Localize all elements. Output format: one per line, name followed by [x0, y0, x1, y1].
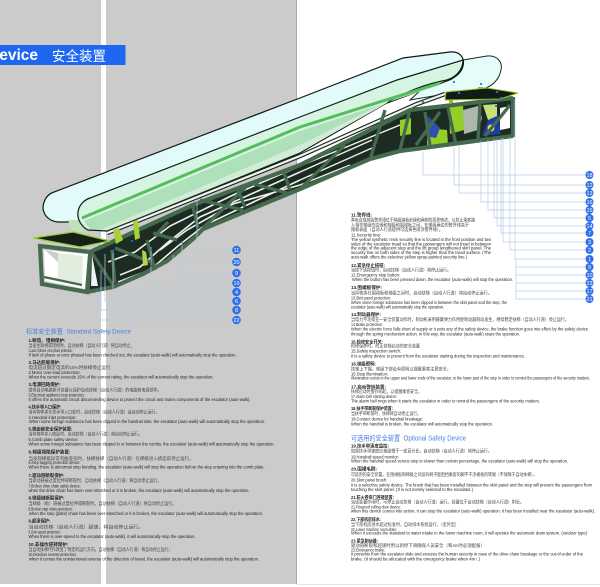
item 12: [351, 262, 513, 282]
item 6: 6.Step sagging protection device:: [28, 460, 80, 465]
item 20: [351, 466, 592, 492]
item 23: It prevents from the escalator slide and ensures the human security in case of the drive chain breakage or the out-of-order of the: [351, 552, 584, 556]
leader lines and number markers: right side: 13: [586, 191, 593, 197]
item 13: escalator (auto-walk) will automatically stop the operation.: [351, 304, 444, 310]
item 15: [351, 338, 525, 358]
item 6: 6.梯级塌陷保护装置:: [28, 448, 71, 456]
item 22: [351, 516, 587, 536]
item 11: security line on both sides of the step is higher than the tread surface. (The: [351, 250, 492, 255]
item 5: 5.梳齿板安全保护装置:: [28, 426, 73, 432]
item 23: [351, 538, 584, 562]
support under far balustrade: [68, 220, 84, 232]
item 19: 19.扶手带速度监控:: [351, 442, 390, 450]
item 3: 提供自动电路断开装置以保护自动扶梯（自动人行道）的电路和电源部件。: [28, 386, 162, 394]
leader lines and number markers: left side: 19: [233, 281, 240, 287]
leader lines and number markers: left side: 20: [233, 260, 240, 266]
item 13: 13.围裙板保护:: [351, 284, 383, 291]
item 8: [28, 494, 263, 516]
item 10: [28, 541, 259, 562]
item 20: touching the skirt panel. (It is not merely selected to the escalator.): [351, 487, 474, 492]
item 21: 当该装置作用时，可停止自动扶梯（自动人行道）运行。装置位于自动扶梯（自动人行道）附近。: [351, 498, 524, 506]
item 20: 20.围裙毛刷:: [351, 466, 378, 472]
item 7: [28, 472, 250, 493]
item 15: It is a safety device to prevent from the escalator starting during the inspection and maintenance.: [351, 354, 525, 358]
item 11: 入相邻梯级的边缘和梯级和围裙板之间。在梯级两边的警界线高于: [351, 222, 470, 228]
leader lines and number markers: right side: 18: [586, 173, 593, 179]
leader lines and number markers: right side: 2: [588, 248, 591, 254]
item 18: 当扶手带断裂时，扶梯将自动停止运行。: [351, 410, 421, 417]
item 13: [351, 284, 507, 310]
item 8: 当梯级（板）链被过度拉伸或断裂时，自动扶梯（自动人行道）将自动停止运行。: [28, 500, 176, 507]
item 11: 11.警界线:: [351, 212, 373, 218]
item 1: 1.Lack of phase, error phase protection:: [28, 348, 72, 353]
item 12: 12.Emergency stop button:: [351, 272, 400, 278]
item 11: 黄色合成树脂警界线位于梯级踏板前缘和两侧的周界转述，以防止乘客踏: [351, 216, 476, 224]
item 1: 当发生缺相或错相时，自动扶梯（自动人行道）将自动停止。: [28, 342, 134, 349]
item 21: 21.Fireproof rolling door device:: [351, 504, 401, 510]
item 9: 当自动扶梯（自动人行道）超速，将自动停止运行。: [28, 524, 144, 530]
title banner: 安全装置: [52, 48, 106, 64]
item 19: 19.Handrail speed monitor:: [351, 454, 399, 460]
heading: standard safety device: 标准安全装置 Standard Safety Device: [26, 326, 131, 336]
item 4: When some foreign substance has been clipped in the handrail inlet, the escalator (auto-walk) will automatically stop the operation.: [29, 419, 265, 424]
item 17: The alarm bell rings when it starts the escalator in order to remind the passengers of the security matters.: [351, 398, 540, 404]
item 6: When there is abnormal step bending, the escalator (auto-walk) will stop the operation before the step entering into the comb plate.: [28, 464, 264, 470]
item 17: 17.启动警铃装置:: [351, 384, 387, 390]
item 11: the edge of the adjacent step and the lift group lengthened skirt panel. The: [351, 246, 492, 250]
leader lines and number markers: left side: 4: [235, 290, 238, 296]
item 22: When it exceeds the standard to water intake in the lower machine room, it will operate the automatic drain system. (outdoor type): [351, 530, 587, 536]
item 11: sides of the escalator tread so that the passengers will not tread in between: [351, 242, 492, 246]
leader lines and number markers: right side: 10: [586, 273, 593, 279]
item 3: 3.电源回路保护:: [28, 381, 61, 388]
yellow posts: [113, 220, 140, 244]
item 12: 当按下该按钮时，自动扶梯（自动人行道）将停止运行。: [351, 266, 451, 274]
item 5: 当有物体夹入梳齿时，自动扶梯（自动人行道）将自动停止运行。: [28, 430, 142, 438]
item 16: 扶梯上下端。梯级下部设有照明以提醒乘客注意安全。: [351, 366, 451, 372]
item 4: 4.Handrail inlet protection:: [28, 415, 76, 420]
leader lines and number markers: right side: 1: [588, 257, 591, 263]
item 15: 15.检修安全开关:: [351, 338, 383, 346]
right deck: [445, 88, 518, 100]
item 20: 20.Skirt panel brush:: [351, 478, 387, 482]
item 4: 4.扶手带入口保护:: [28, 404, 62, 410]
left end box: [40, 246, 90, 292]
leader lines and number markers: right side: 5: [588, 216, 591, 222]
leader lines and number markers: right side: 9: [588, 265, 591, 271]
item 13: 当异物夹在围裙板和梯级之间时，自动扶梯（自动人行道）将自动停止运行。: [351, 290, 492, 296]
item 19: When the handrail speed versus step is slower than certain percentage, the escalator (auto-walk) will stop the operation.: [351, 458, 568, 464]
text block: standard devices 11-18: [351, 212, 590, 426]
item 13: 13.Skirt panel protection:: [351, 296, 391, 300]
item 23: 23.Emergency brake:: [351, 548, 385, 552]
far balustrade upper end: [410, 56, 501, 100]
item 17: 17.Alarm bell starting device:: [351, 394, 397, 399]
item 2: 2.Motor over-load protection:: [28, 370, 80, 375]
item 7: when the drive chain has been over-stretched or it is broken, the escalator (auto-walk) will automatically stop the operation.: [28, 488, 250, 493]
item 8: 8.梯级链断裂保护:: [28, 494, 65, 502]
item 11: 11.Security line:: [351, 232, 381, 238]
escalator illustration: [33, 52, 518, 293]
item 16: 16.Step illumination:: [351, 372, 388, 376]
green stripe: [82, 83, 440, 218]
item 7: 当驱动链被过度拉伸或断裂时，自动扶梯（自动人行道）将自动停止运行。: [28, 477, 162, 484]
item 16: 16.梯级照明:: [351, 360, 377, 368]
item 14: 14.Brake protection:: [351, 322, 383, 327]
item 22: 22.Lower machine room drain:: [351, 527, 397, 532]
item 18: [351, 405, 493, 426]
item 14: 14.制动器保护:: [351, 311, 382, 318]
item 17: [351, 384, 540, 404]
leader lines and number markers: right side: 3: [588, 240, 591, 246]
item 19: [351, 442, 568, 464]
item 15: 15.Safety inspection switch:: [351, 348, 401, 354]
leader lines and number markers: right side: 7: [588, 231, 591, 237]
leader lines and number markers: left side: 11: [234, 248, 239, 254]
item 7: 7.Broken drive chain safety device:: [28, 484, 80, 488]
item 2: When the current exceeds 15% of the current rating, the escalator will automatically stop the operation.: [28, 374, 214, 380]
item 5: When some foreign substance has been clipped in or between the combs, the escalator (auto-walk) will automatically stop the operation.: [28, 442, 274, 446]
leader lines and number markers: left side: 22: [233, 318, 240, 324]
leader lines and number markers: right side: 21: [586, 297, 593, 303]
item 20: 可选用的安全装置。在围裙板和梯级之间设有刷子能阻挡乘客的脚不干涉裙板的转端（不保障于自动扶梯）。: [351, 471, 537, 478]
item 1: If lack of phase or error phased has been checked out, the escalator (auto-walk) will automatically stop the operation.: [28, 352, 236, 358]
item 11: The yellow synthetic resin security line is located in the front position and two: [351, 237, 492, 242]
item 9: 9.超速保护:: [28, 518, 51, 524]
step band: [107, 94, 445, 233]
item 18: 18.扶手带断裂保护装置:: [351, 405, 393, 412]
item 8: 8.Broken step chain protection:: [28, 506, 72, 512]
item 22: 22.下部机房排水:: [351, 516, 381, 523]
leader lines and number markers: right side: 12: [586, 183, 593, 189]
item 10: 当自动扶梯代作改变了预定的运行方向，自动扶梯（自动人行道）将自动停止运行。: [28, 546, 172, 553]
item 9: 9.Over-speed protection:: [28, 530, 60, 534]
leader lines and number markers: right side: 23: [586, 281, 593, 287]
item 23: brake. (It should be allocated with the emergency brake when 4m↑.): [351, 556, 481, 562]
item 1: [28, 337, 236, 358]
left deck: [33, 232, 110, 247]
item 8: when the step (plate) chain has been over-stretched or it is broken, the escalator (auto-walk) will automatically stop the operation.: [29, 511, 263, 516]
item 3: [28, 381, 250, 402]
bottom glass highlight: [100, 100, 390, 230]
item 14: 当电力不足或任一安全装置动作时，制动机采用碟簧弹力作用使制动器制动发生，继续稳定扶梯（自动人行道）停止运行。: [351, 316, 569, 323]
item 2: 2.马达超载保护:: [28, 359, 61, 366]
item 3: It offers the automatic circuit disconnecting device to protect the circuit and mains components of the escalator (auto-walk).: [28, 397, 250, 402]
item 2: [28, 359, 214, 380]
item 18: When the handrail is broken, the escalator will automatically stop the operation.: [351, 422, 493, 426]
leader lines and number markers: right side: 15: [586, 208, 593, 214]
leader lines and number markers: right side: 17: [586, 289, 593, 295]
item 17: 扶梯启动时警铃响起，以提醒乘客安全。: [351, 388, 422, 395]
long pale balustrade: [43, 52, 463, 226]
item 14: through the spring mechanism action. In this way, the escalator (auto-walk) stops the operation.: [351, 332, 520, 336]
item 12: When the button has been pressed down, the escalator (auto-walk) will stop the operation.: [352, 277, 513, 282]
item 1: 1.断电、错相保护:: [28, 337, 66, 344]
item 21: [351, 494, 595, 514]
item 10: 10.Direction reverse protection:: [28, 552, 76, 557]
text block: optional devices 19-23: [351, 442, 595, 562]
item 6: [28, 448, 264, 470]
item 11: [351, 212, 492, 260]
item 14: [351, 311, 589, 336]
item 9: When there is over-speed to the escalator (auto-walk), it will automatically stop the operation.: [28, 534, 196, 539]
item 18: 18.Contact device for handrail breakage:: [351, 416, 423, 422]
item 11: auto-walk offers the selective yellow spray-painted security line.): [351, 254, 467, 260]
title banner: [0, 45, 126, 65]
item 9: [28, 518, 196, 539]
leader lines and number markers: right side: [422, 81, 594, 303]
heading: optional safety device: 可选用的安全装置 Optional Safety Device: [351, 434, 466, 442]
item 10: 10.非操作逆转保护:: [28, 541, 69, 548]
item 19: 如果扶手带速度比梯级慢于一定百分比，自动扶梯（自动人行道）将停止运行。: [351, 448, 492, 454]
truss interior: [87, 97, 513, 293]
item 16: [351, 360, 590, 380]
truss frame: [87, 97, 513, 292]
item 22: 当下部机房进水超过标准时，自动排水系统运行。（室外型）: [351, 521, 459, 528]
leader lines and number markers: right side: 14: [586, 224, 593, 230]
item 6: 当发现梯级异常弯曲变形时，扶梯扶梯（自动人行道）在梯级进入梳齿前停止运行。: [28, 455, 194, 462]
item 7: 7.驱动链断裂保护:: [28, 472, 65, 479]
leader lines and number markers: right side: 16: [586, 200, 593, 206]
item 4: [28, 404, 265, 424]
item 5: 5.Comb plate safety device:: [28, 437, 78, 442]
item 23: 驱动链断裂和超速时用以刹停下滑确保人员安全（和4m时必须配备）: [351, 542, 485, 549]
item 5: [28, 426, 274, 446]
item 12: 12.紧急停止按钮:: [351, 262, 386, 269]
item 21: 21.防火卷帘门连接装置:: [351, 494, 394, 501]
item 11: 踏板表面（自动人行道提供可选黄色喷涂警界线）。: [351, 226, 443, 233]
item 3: 3.Electrical appliance loop protection:: [28, 392, 84, 398]
item 2: 电流超过额定电流的15%时扶梯停止运行: [28, 364, 111, 371]
leader lines and number markers: left side: 9: [235, 271, 238, 277]
leader lines and number markers: left side: 6: [235, 299, 238, 305]
near glass balustrade: [78, 60, 463, 231]
lower glass tint: [84, 85, 440, 230]
text block: standard devices 1-10: [28, 337, 274, 562]
item 10: when it comes the unintentional reverse of the direction of travel, the escalator (auto-walk) will automatically stop the operation.: [29, 556, 259, 562]
item 15: 检修保养时，防止扶梯启动的安全装置: [351, 342, 421, 350]
item 13: When some foreign substance has been clipped in between the skirt panel and the step, the: [351, 300, 507, 305]
machinery right: [400, 118, 411, 136]
white rails: [108, 166, 300, 282]
item 23: 23.紧急制动器:: [351, 538, 378, 544]
leader lines and number markers: left side: 8: [235, 308, 238, 314]
item 4: 当有物体夹在扶手带入口处时，自动扶梯（自动人行道）会自动停止运行。: [28, 408, 160, 416]
leader lines and number markers: left side: [96, 198, 241, 324]
